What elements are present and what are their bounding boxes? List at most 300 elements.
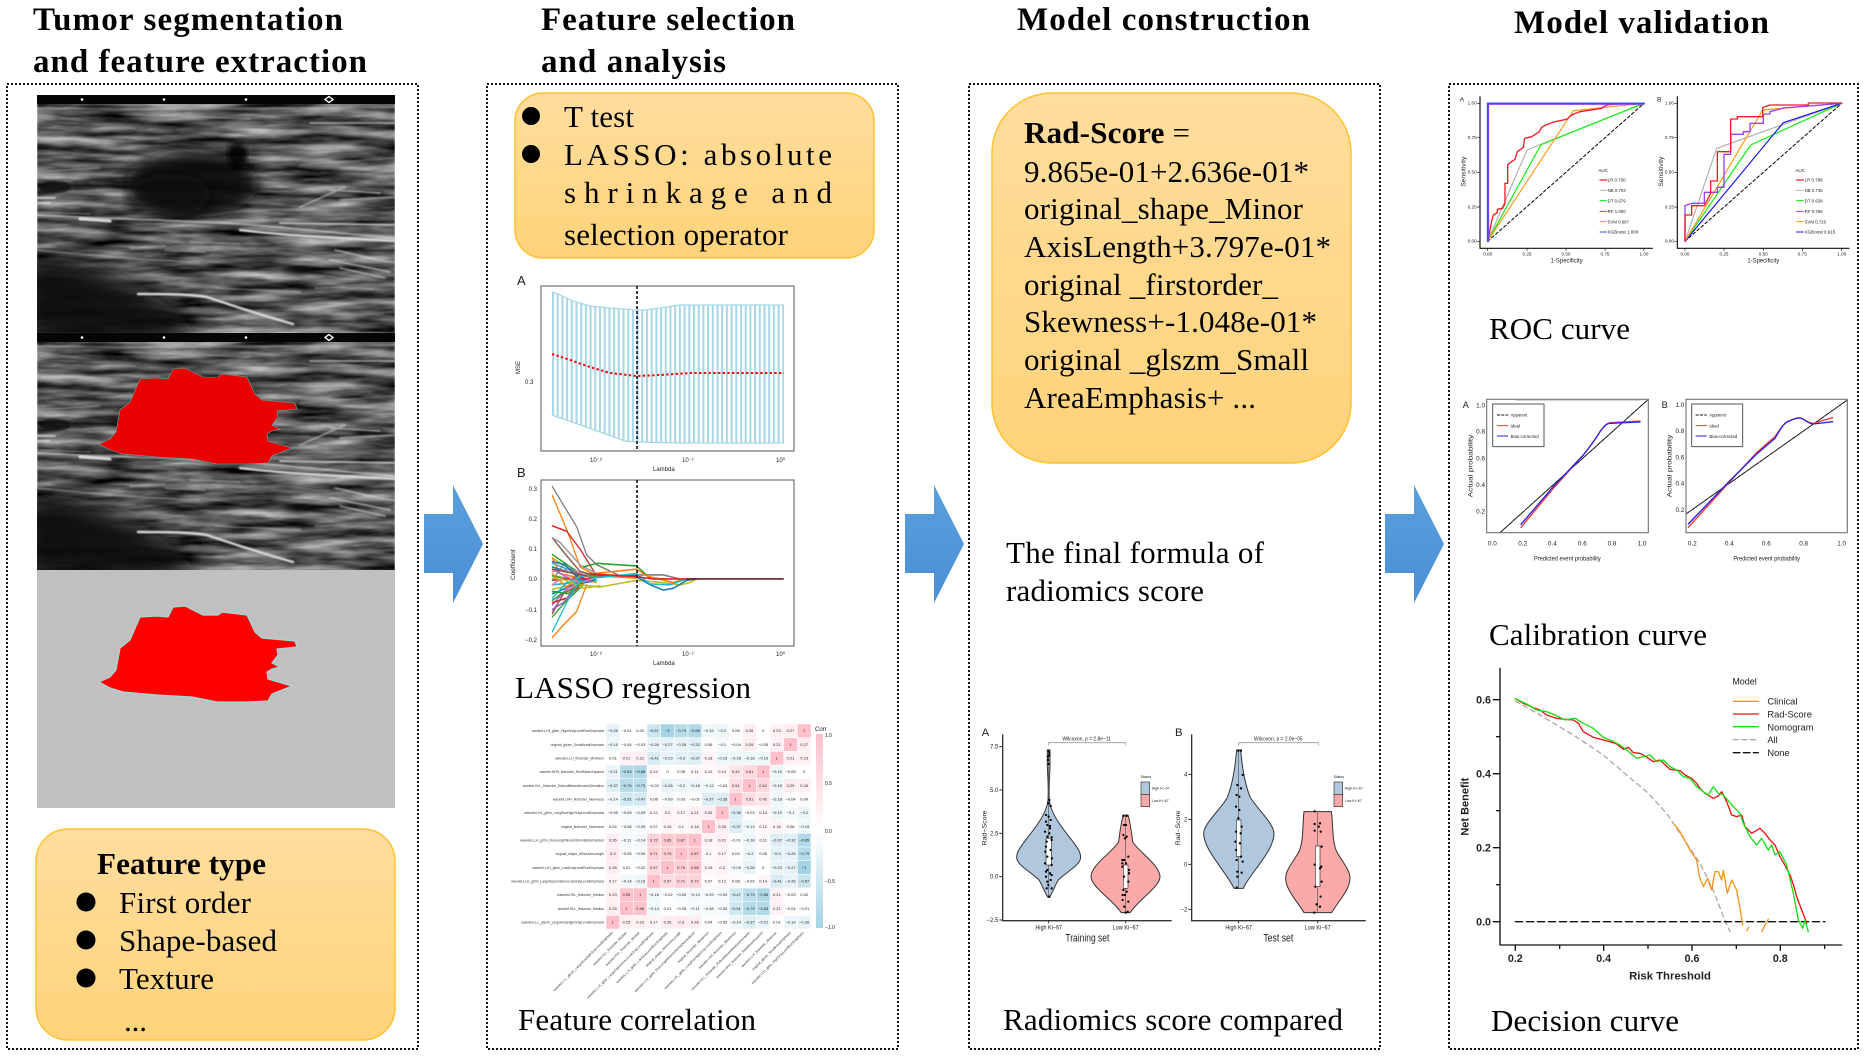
calibration A [1463,399,1648,562]
chart: violin plots [982,727,1366,945]
chart: LASSO MSE: 10⁻¹ [682,458,694,464]
chart: feature correlation heatmap: −0.08 [703,906,714,911]
callout: feature type: Feature type [97,846,266,881]
violin: test set: 0 [1184,862,1188,868]
chart: feature correlation heatmap: −0.05 [758,742,769,747]
chart: feature correlation heatmap: −0.23 [662,756,673,760]
chart: feature correlation heatmap: 0.61 [746,769,754,774]
chart: feature correlation heatmap: −0.51 [621,796,632,802]
chart: feature correlation heatmap: −1 [802,865,807,870]
chart: feature correlation heatmap: wavelet.LLH_glrlm_HighGrayLevelRunEmphasis [751,931,805,985]
chart: feature correlation heatmap: −0.14 [621,878,632,884]
chart: LASSO coefficient paths: 0.2 [529,517,538,523]
chart: feature correlation heatmap: −0.32 [690,742,701,747]
chart: LASSO coefficient paths: B [517,465,526,480]
chart: feature correlation heatmap: −0.03 [717,783,728,788]
chart: feature correlation heatmap: original_firstorder_Skewness [561,825,604,829]
chart: feature correlation heatmap: 0.12 [718,878,727,884]
calibration A: 1.0 [1476,402,1485,409]
chart: feature correlation heatmap: 1 [776,756,779,760]
chart: decision curve: Net Benefit [1459,777,1471,836]
chart: feature correlation heatmap: 0.57 [650,865,658,870]
callout: rad-score formula [992,93,1351,463]
chart: feature correlation heatmap: 0.02 [800,892,809,897]
chart: feature correlation heatmap: 0 [762,865,765,870]
chart: ROC curves [1460,96,1849,265]
chart: feature correlation heatmap: −0.5 [825,879,835,885]
calibration B: 0.4 [1725,540,1734,547]
chart: feature correlation heatmap: 0.07 [705,878,713,884]
ROC B: 0.25 [1665,204,1674,209]
callout: rad-score formula: AreaEmphasis+ ... [1024,380,1256,415]
chart: LASSO coefficient paths: 10⁻¹ [682,652,694,658]
chart: feature correlation heatmap: −0.37 [744,920,755,924]
ROC A: 0.00 [1483,251,1493,256]
chart: LASSO coefficient paths: 0.1 [529,547,538,553]
chart: feature correlation heatmap: −0.14 [690,892,701,897]
chart: LASSO coefficient paths: Lambda [653,661,675,667]
image: segmentation mask [37,570,395,808]
chart: feature correlation heatmap: −0.15 [703,728,714,733]
chart: feature correlation heatmap: −0.41 [772,878,783,884]
chart: decision curve: Model [1732,676,1757,686]
chart: feature correlation heatmap: −0.11 [622,838,632,842]
chart: feature correlation heatmap: 0.17 [609,878,617,884]
chart: feature correlation heatmap: −0.37 [608,783,619,788]
ROC B: LR 0.798 [1805,178,1823,183]
calibration B: Bias-corrected [1709,434,1738,440]
ROC A: 1.00 [1468,101,1477,106]
calibration B: B [1662,400,1668,410]
caption: ROC curve: ROC curve [1489,311,1630,346]
chart: feature correlation heatmap: Corr [815,727,827,733]
chart: feature correlation heatmap: 0.11 [691,769,699,774]
ROC A: DT 0.679 [1608,198,1626,203]
chart: feature correlation heatmap: −1.0 [825,925,835,931]
chart: feature correlation heatmap: 0.08 [650,796,658,802]
chart: feature correlation heatmap: −0.2 [746,851,754,856]
chart: decision curve: Nomogram [1767,722,1814,732]
chart: decision curve: 0.4 [1476,768,1491,780]
ROC B: 1.00 [1665,101,1674,106]
chart: feature correlation heatmap: 0.21 [787,756,795,760]
caption: calibration curve: Calibration curve [1489,617,1707,652]
panel: feature selection and analysis [487,2,898,1049]
chart: feature correlation heatmap: wavelet.LHL_glrlm_LongRunHighGrayLevelEmphasis [663,931,723,990]
chart: feature correlation heatmap: 0.3 [610,851,616,856]
chart: feature correlation heatmap: 0.15 [705,865,713,870]
chart: feature correlation heatmap: wavelet.HLL_firstorder_Median [592,931,628,966]
chart: feature correlation heatmap: 1 [666,865,669,870]
chart: decision curve: 0.6 [1685,953,1699,965]
chart: feature correlation heatmap: 0.23 [609,892,617,897]
violin: training set: Rad−Score [982,810,988,845]
ROC B: Sensitivity [1658,156,1665,187]
chart: feature correlation heatmap: 0.79 [677,865,686,870]
chart: feature correlation heatmap: −0.19 [772,810,783,815]
chart: decision curve: 0.2 [1476,842,1491,854]
violin: test set: Status [1334,775,1344,779]
chart: feature correlation heatmap: 0.21 [636,756,645,760]
chart: feature correlation heatmap: −0.57 [649,728,660,733]
calibration A: Apparent [1511,413,1528,419]
caption: final formula: The final formula of [1006,535,1265,570]
chart: feature correlation heatmap: 0.06 [732,728,740,733]
chart: feature correlation heatmap: 0.11 [759,838,768,842]
calibration B [1662,399,1847,562]
chart: feature correlation heatmap: 0.29 [787,783,795,788]
chart: feature correlation heatmap: 0.26 [691,920,699,924]
chart: feature correlation heatmap: −0.32 [785,838,796,842]
chart: feature correlation heatmap: −0.88 [758,892,769,897]
chart: feature correlation heatmap: 0.01 [664,906,672,911]
violin: test set: Low Ki−67 [1305,924,1331,931]
callout: rad-score formula: Skewness+-1.048e-01* [1024,304,1317,339]
calibration A: Actual probability [1467,434,1474,497]
chart: feature correlation heatmap: −0.26 [649,742,660,747]
chart: feature correlation heatmap: 0.26 [664,920,672,924]
chart: feature correlation heatmap: −0.26 [744,865,755,870]
chart: feature correlation heatmap: −0.14 [608,796,619,802]
chart: feature correlation heatmap: −0.18 [744,756,755,760]
image: ultrasound with red tumor overlay [20,333,395,583]
chart: LASSO coefficient paths [510,465,794,667]
violin: test set: Low Ki−67 [1345,799,1362,803]
chart: feature correlation heatmap: 0.14 [759,810,768,815]
chart: LASSO MSE: A [517,273,526,288]
ROC A: SVM 0.697 [1608,219,1629,224]
chart: feature correlation heatmap: 0.27 [800,742,809,747]
callout: T test and LASSO: LASSO: absolute [564,137,832,172]
chart: feature correlation heatmap: −0.11 [690,906,700,911]
chart: feature correlation heatmap: 0 [666,769,669,774]
calibration B: 0.6 [1762,540,1771,547]
chart: feature correlation heatmap: 0.07 [650,824,658,829]
chart: feature correlation heatmap: −0.09 [731,865,742,870]
chart: feature correlation heatmap: −0.09 [717,906,728,911]
violin: training set: Status [1141,775,1151,779]
chart: LASSO coefficient paths: −0.1 [525,608,538,614]
chart: feature correlation heatmap: −0.83 [621,769,632,774]
chart: LASSO MSE: 10⁻² [590,458,602,464]
chart: feature correlation heatmap: −0.05 [608,810,619,815]
ROC B: 0.25 [1719,251,1729,256]
chart: feature correlation heatmap: −0.73 [744,892,755,897]
chart: feature correlation heatmap: −0.13 [744,824,755,829]
ROC B: B [1657,96,1662,103]
chart: feature correlation heatmap: 0.21 [691,810,699,815]
chart: feature correlation heatmap: 0.17 [650,920,658,924]
chart: feature correlation heatmap: −0.37 [731,824,742,829]
violin: test set [1175,727,1366,945]
chart: feature correlation heatmap: −0.21 [758,920,769,924]
chart: feature correlation heatmap: 1 [803,728,806,733]
chart: feature correlation heatmap: wavelet.LLH_glrlm_LargeDependenceLowGrayLevelEmphasis [586,931,655,999]
chart: feature correlation heatmap: −0.51 [731,906,742,911]
ROC A: A [1460,96,1465,103]
chart: decision curve: Clinical [1767,697,1797,707]
calibration A: A [1463,400,1470,410]
chart: feature correlation heatmap: −0.3 [677,756,686,760]
calibration B: 0.2 [1676,507,1685,514]
chart: feature correlation heatmap: −0.18 [772,783,783,788]
heading: tumor segmentation: and feature extraction [33,44,367,80]
ROC A: RF 1.000 [1608,209,1626,214]
chart: feature correlation heatmap: −0.04 [785,906,796,911]
violin: training set: High Ki−67 [1152,786,1170,790]
chart: decision curve [1459,668,1842,982]
chart: decision curve: 0.4 [1596,953,1611,965]
ROC A [1460,96,1652,265]
violin: test set: B [1175,727,1183,739]
chart: feature correlation heatmap: −0.88 [635,769,646,774]
chart: LASSO coefficient paths: 0.0 [529,577,538,583]
violin: training set: Low Ki−67 [1152,799,1169,803]
panel: tumor segmentation and feature extraction [7,2,418,1049]
arrow: step 1 to 2 [424,485,483,603]
chart: feature correlation heatmap: −0.16 [635,878,646,884]
ROC B: NB 0.735 [1805,188,1823,193]
chart: feature correlation heatmap: −0.2 [677,783,686,788]
chart: feature correlation heatmap: wavelet.HLL_firstorder_Median [558,907,604,911]
chart: feature correlation heatmap: original_firstorder_Skewness [677,931,710,964]
calibration A: 0.4 [1548,540,1557,547]
heading: feature selection: Feature selection [541,2,795,38]
ROC A: AUC [1598,168,1609,173]
chart: feature correlation heatmap: −0.18 [731,756,742,760]
chart: decision curve: 0.2 [1508,953,1523,965]
chart: feature correlation heatmap: 0.29 [746,742,754,747]
ROC A: 0.50 [1468,170,1477,175]
chart: feature correlation heatmap: 0.27 [787,728,795,733]
chart: feature correlation heatmap: wavelet.LLH_glrlm_HighGrayLevelRunEmphasis [532,729,604,733]
chart: feature correlation heatmap: 0.87 [691,851,699,856]
chart: feature correlation heatmap: wavelet.HHL_firstorder_Median [557,893,604,897]
chart: feature correlation heatmap: wavelet.LLH_firstorder_Minimum [555,756,604,760]
chart: feature correlation heatmap: −0.41 [649,756,660,760]
ROC B: 1-Specificity [1747,258,1780,265]
chart: feature correlation heatmap: −0.1 [787,810,795,815]
chart: feature correlation heatmap: wavelet.HLL_firstorder_RobustMeanAbsoluteDeviation [523,784,604,788]
chart: feature correlation heatmap: −0.09 [621,810,632,815]
chart: feature correlation heatmap: wavelet.LLH_firstorder_Minimum [740,931,778,968]
chart: feature correlation heatmap: 0.12 [759,824,768,829]
chart: feature correlation heatmap: 0.12 [650,810,658,815]
callout: feature type: First order [119,885,252,920]
chart: LASSO coefficient paths: −0.2 [525,638,538,644]
calibration B: 0.8 [1676,428,1685,435]
chart: feature correlation heatmap: −0.09 [717,892,728,897]
ROC B: 1.00 [1837,251,1847,256]
calibration A: Predicted event probability [1534,555,1601,562]
caption: feature correlation: Feature correlation [518,1002,756,1037]
violin: training set: A [982,727,990,739]
calibration A: 0.0 [1488,540,1497,547]
chart: feature correlation heatmap: −0.03 [649,783,660,788]
calibration B: 0.8 [1799,540,1809,547]
chart: feature correlation heatmap: −0.73 [635,783,646,788]
chart: feature correlation heatmap: −0.04 [621,742,632,747]
calibration B: 0.6 [1676,454,1685,461]
chart: feature correlation heatmap: 0 [803,769,806,774]
chart: feature correlation heatmap: 0.72 [650,838,658,842]
chart: decision curve: None [1767,748,1790,758]
chart: feature correlation heatmap: −0.14 [635,838,646,842]
chart: feature correlation heatmap: 0.95 [623,892,631,897]
callout: feature type: Texture [119,961,214,996]
chart: feature correlation heatmap: 0.26 [609,838,617,842]
chart: feature correlation heatmap: −0.19 [608,742,619,747]
violin: training set: Wilcoxon, p = 2.8e−11 [1062,737,1111,743]
chart: feature correlation heatmap: 0.72 [691,878,699,884]
chart: feature correlation heatmap: −0.26 [608,728,619,733]
chart: decision curve: All [1767,735,1778,745]
violin: test set: Wilcoxon, p = 2.0e−05 [1254,737,1303,743]
chart: feature correlation heatmap: −0.02 [662,892,673,897]
chart: feature correlation heatmap: original_glszm_SmallAreaEmphasis [551,743,604,747]
chart: feature correlation heatmap: −0.19 [717,756,728,760]
calibration A: 1.0 [1638,540,1647,547]
chart: feature correlation heatmap: 0.71 [677,878,686,884]
chart: feature correlation heatmap: 0.26 [718,824,727,829]
violin: training set: 2.5 [990,831,999,837]
calibration B: Predicted event probability [1733,555,1801,562]
chart: feature correlation heatmap: 0.23 [636,920,645,924]
chart: feature correlation heatmap: −0.03 [744,810,755,815]
chart: feature correlation heatmap: 0.26 [609,865,617,870]
chart: LASSO coefficient paths: 10⁻² [590,652,602,658]
chart: feature correlation heatmap: 0.14 [650,769,658,774]
callout: rad-score formula: 9.865e-01+2.636e-01* [1024,154,1309,189]
chart: feature correlation heatmap: −0.05 [717,920,728,924]
ROC A: XGBoost 1.000 [1608,230,1639,235]
calibration B: Ideal [1709,423,1719,429]
ROC B: 0.75 [1665,135,1674,140]
calibration A: 0.4 [1476,482,1485,489]
chart: feature correlation heatmap: −0.37 [772,838,783,842]
callout: feature type: ... [124,1003,147,1038]
chart: feature correlation heatmap: wavelet.LLH_glrlm_LargeDependenceLowGrayLevelEmphasis [511,880,604,884]
chart: feature correlation heatmap: −0.79 [676,728,687,733]
chart: feature correlation heatmap: −0.83 [758,906,769,911]
chart: feature correlation heatmap: 0.57 [664,878,672,884]
caption: LASSO regression: LASSO regression [515,670,752,705]
chart: feature correlation heatmap: −0.05 [676,906,687,911]
violin: training set: −2.5 [987,918,999,924]
chart: feature correlation heatmap: −0.18 [744,838,755,842]
violin: training set: 0.0 [990,875,999,881]
ROC A: 0.00 [1468,239,1477,244]
ROC A: 1.00 [1639,251,1649,256]
chart: feature correlation heatmap: 0.25 [609,906,617,911]
chart: feature correlation heatmap: 0.42 [759,796,768,802]
chart: feature correlation heatmap: 1.0 [825,733,832,739]
ROC A: 0.75 [1468,135,1477,140]
chart: feature correlation heatmap: 0.14 [718,769,727,774]
chart: feature correlation heatmap: −0.57 [799,878,810,884]
chart: feature correlation heatmap: 0.26 [705,810,713,815]
calibration B: 0.4 [1676,481,1685,488]
chart: feature correlation heatmap: −0.09 [703,892,714,897]
chart: LASSO MSE: MSE [516,361,522,374]
ROC B: DT 0.638 [1805,198,1823,203]
chart: feature correlation heatmap: 0.05 [759,851,768,856]
chart: feature correlation heatmap: −0.16 [649,892,660,897]
arrow: step 3 to 4 [1385,485,1444,603]
calibration A: 0.8 [1476,429,1485,436]
chart: feature correlation heatmap: −0.47 [731,892,742,897]
callout: T test and LASSO: shrinkage and [564,175,832,210]
chart: feature correlation heatmap: −0.09 [662,796,673,802]
calibration B: Apparent [1709,413,1726,419]
chart: feature correlation heatmap: −0.38 [731,810,742,815]
violin: training set: Low Ki−67 [1113,924,1139,931]
chart: feature correlation heatmap: 0.1 [706,851,712,856]
chart: feature correlation heatmap: original_shape_MinorAxisLength [645,931,682,968]
chart: LASSO coefficient paths: Coefficient [510,549,517,580]
chart: feature correlation heatmap: −0.26 [785,851,796,856]
chart: decision curve: 0.0 [1476,916,1491,928]
chart: feature correlation heatmap: −0.85 [690,728,701,733]
calibration B: 1.0 [1676,402,1685,409]
chart: LASSO MSE [516,273,794,473]
chart: feature correlation heatmap: 0.0 [825,829,832,835]
ROC B: 0.00 [1680,251,1690,256]
chart: feature correlation heatmap: 0.71 [650,851,658,856]
calibration A: 0.8 [1608,540,1617,547]
chart: LASSO MSE: Lambda [653,467,675,473]
ROC B: 0.00 [1665,239,1674,244]
ROC A: 0.75 [1600,251,1610,256]
chart: feature correlation heatmap: 1 [639,892,642,897]
chart: feature correlation heatmap: 0.01 [609,756,617,760]
callout: feature type: Shape-based [119,923,278,958]
chart: feature correlation heatmap: −0.09 [676,892,687,897]
chart: feature correlation heatmap: 0.04 [705,920,713,924]
caption: radiomics score compared: Radiomics score compared [1003,1002,1344,1037]
chart: feature correlation heatmap: 1 [721,810,724,815]
chart: feature correlation heatmap: 1 [707,824,710,829]
ROC B: 0.50 [1759,251,1768,256]
callout: T test and LASSO: selection operator [564,217,789,252]
chart: decision curve: 0.6 [1476,694,1491,706]
chart: feature correlation heatmap: wavelet.HHL_firstorder_Median [605,931,641,967]
chart: feature correlation heatmap: 0.01 [623,865,631,870]
chart: feature correlation heatmap: 0.25 [623,920,631,924]
chart: feature correlation heatmap: 1 [694,838,697,842]
heading: feature selection: and analysis [541,44,726,80]
caption: final formula: radiomics score [1006,573,1204,608]
violin: test set: 2 [1184,817,1188,823]
chart: feature correlation heatmap: 0.23 [800,756,809,760]
chart: feature correlation heatmap: −0.26 [785,878,796,884]
chart: feature correlation heatmap: 0.3 [678,920,685,924]
chart: feature correlation heatmap: 0.18 [691,824,699,829]
chart: feature correlation heatmap: 0.21 [773,906,781,911]
violin: training set: High Ki−67 [1035,924,1062,931]
chart: feature correlation heatmap: 0.18 [705,756,713,760]
chart: feature correlation heatmap: 0.12 [705,769,713,774]
chart: feature correlation heatmap: 1 [680,851,683,856]
chart: feature correlation heatmap: −0.37 [703,796,714,802]
violin: test set: High Ki−67 [1345,786,1363,790]
chart: feature correlation heatmap: wavelet.LLH_glrlm_LowGrayLevelRunEmphasis [615,931,669,984]
callout: T test and LASSO: T test [564,99,634,134]
ROC B: 0.50 [1665,170,1674,175]
chart: feature correlation heatmap: 0.21 [773,892,781,897]
chart: feature correlation heatmap: 1 [735,796,738,802]
chart: feature correlation heatmap: −0.27 [785,865,796,870]
